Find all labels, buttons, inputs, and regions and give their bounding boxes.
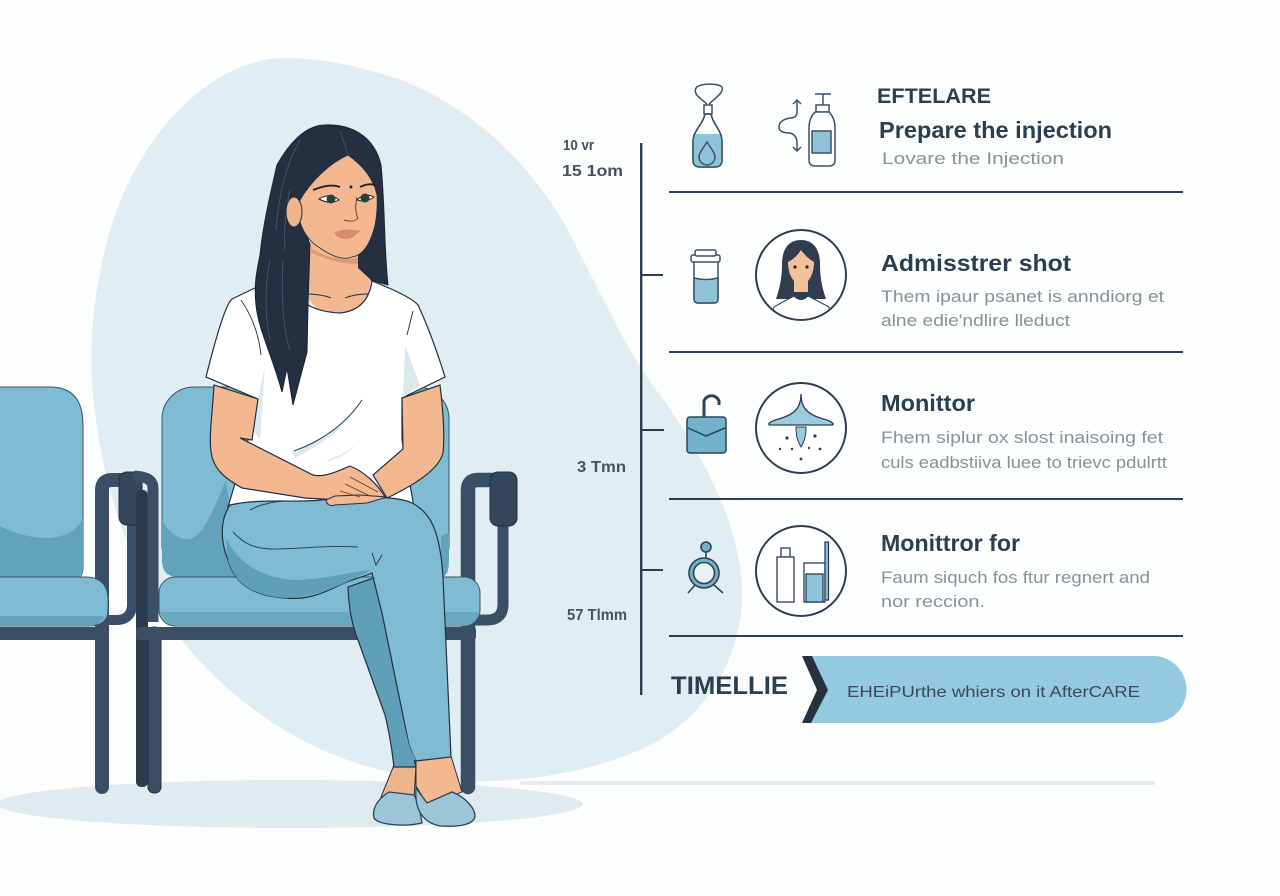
floor line [520,781,1155,785]
shirt wrinkles [241,300,413,451]
icon: funnel with drops [756,383,846,473]
step 2 heading: Admisstrer shot [881,250,1071,276]
step 4 heading: Monittror for [881,530,1020,556]
timeline label: TIMELLIE [671,672,788,700]
icon: woman portrait [756,230,846,325]
left chair [0,387,142,787]
leg shading [226,538,416,760]
step 3 body line 2: culs eadbstiiva luee to trievc pdulrtt [881,453,1167,472]
dividers [669,191,1183,637]
step 1 overline: EFTELARE [877,85,991,108]
main chair [134,387,517,793]
hair strands [266,130,348,350]
back hair [325,125,388,285]
icon: dropper bottle [693,84,722,167]
neck [309,240,371,312]
time label: 3 Tmn: 3 Tmn [577,459,626,476]
facial features [309,184,375,298]
shoes [374,788,475,826]
floor shadow [0,780,583,828]
person [206,125,475,826]
step 4 body line 1: Faum siquch fos ftur regnert and [881,568,1150,587]
hand lines [340,477,378,497]
time label: 10 vr: 10 vr [563,137,594,154]
icon: ring on stand [688,542,723,593]
background blob [91,58,742,781]
shirt shading [253,345,420,462]
t-shirt [206,281,445,507]
hair [255,125,348,405]
ear [286,197,302,227]
step 1 body: Lovare the Injection [882,149,1064,168]
right arm [373,385,444,498]
icon: pump bottle with arrows [779,94,835,166]
step 3 heading: Monittor [881,390,975,416]
chevron arrow [802,656,828,723]
legs [222,497,451,761]
step 2 body line 2: alne edie'ndlire lleduct [881,311,1070,330]
aftercare text: EHEiPUrthe whiers on it AfterCARE [847,684,1140,701]
icon: bag [687,396,726,453]
back leg [348,575,416,767]
icon: bottle and cup [756,526,846,616]
step 4 body line 2: nor reccion. [881,592,985,611]
infographic canvas [0,58,1186,828]
fingers [326,495,387,505]
step 1 heading: Prepare the injection [879,117,1112,143]
face [300,155,377,258]
aftercare band [810,656,1186,723]
feet [381,756,462,806]
step 2 body line 1: Them ipaur psanet is anndiorg et [881,287,1164,306]
step 3 body line 1: Fhem siplur ox slost inaisoing fet [881,428,1163,447]
icon: vial [691,250,720,303]
left arm [210,385,385,500]
time label: 15 1om: 15 1om [562,163,623,180]
time label: 57 Tlmm: 57 Tlmm [567,607,627,624]
leg creases [233,501,382,565]
timeline axis [640,143,664,695]
